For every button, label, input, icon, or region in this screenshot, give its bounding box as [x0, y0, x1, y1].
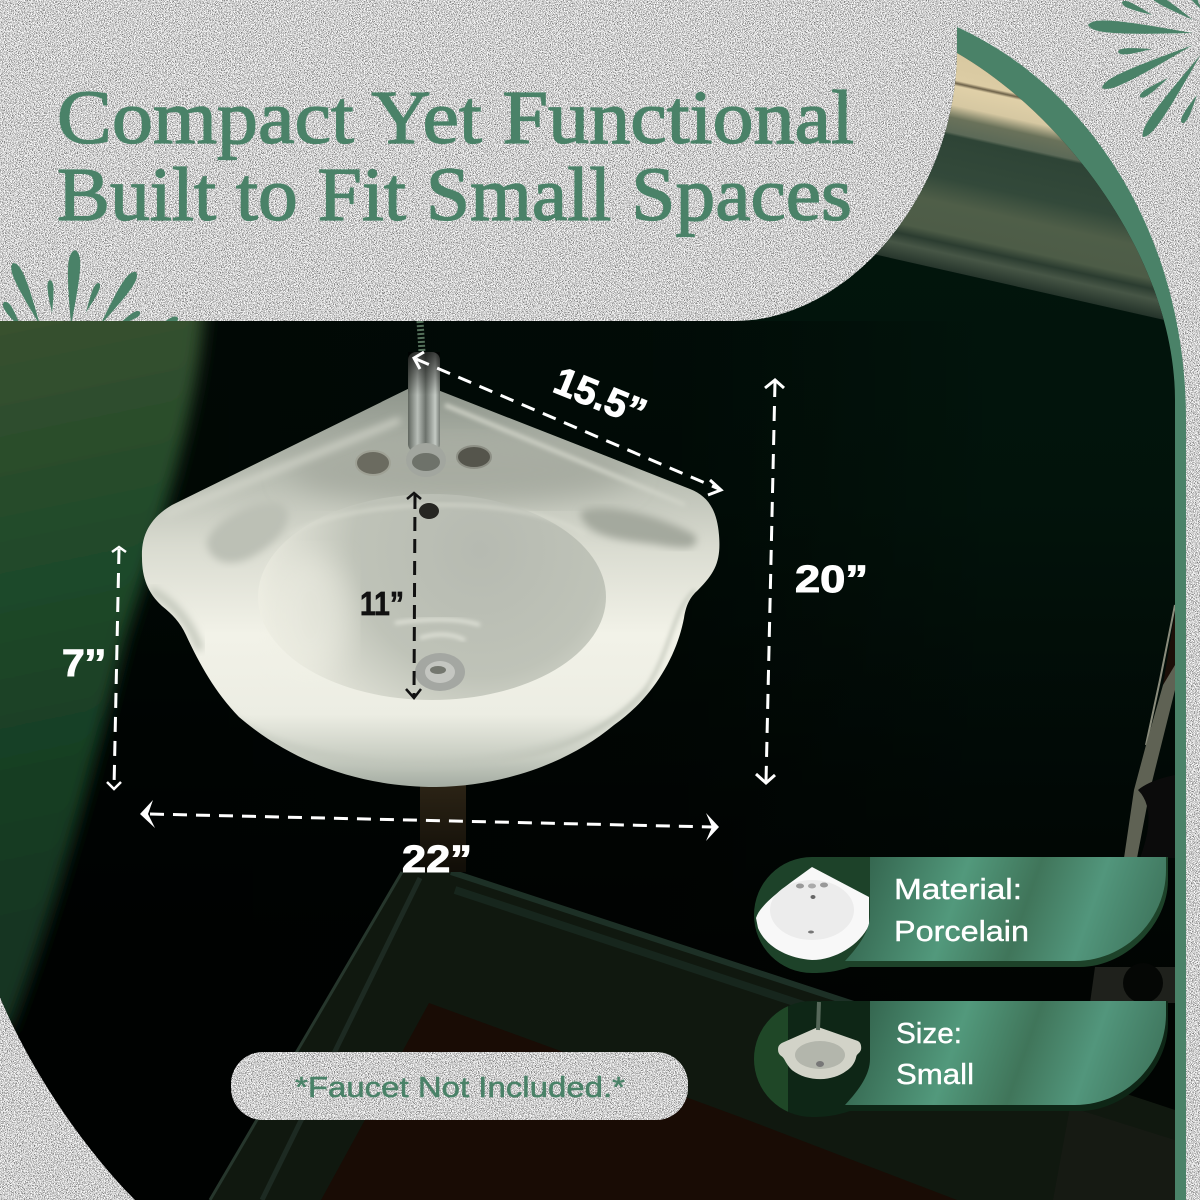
dimension: 11 inch: 11”	[360, 585, 404, 622]
tap holes	[356, 451, 390, 475]
lower lip	[247, 690, 650, 751]
far right panel	[1053, 1107, 1175, 1200]
basin	[258, 494, 606, 700]
wood floor	[321, 1003, 957, 1200]
card: material: Porcelain	[894, 916, 1029, 948]
right rim ridges	[591, 589, 696, 733]
sink support post	[420, 780, 466, 872]
green arc border	[957, 27, 1186, 1200]
note pill: faucet not included: *Faucet Not Included.*	[295, 1072, 625, 1104]
dimension: 11 inch	[360, 493, 421, 698]
sink	[142, 321, 719, 787]
dimension: 7 inch	[62, 547, 126, 789]
right side object	[1090, 605, 1175, 1003]
card: size	[754, 1001, 1168, 1117]
dimension: 22 inch: 22”	[402, 839, 472, 881]
card band	[845, 857, 1166, 961]
title: Compact Yet Functional	[57, 76, 854, 160]
dimension: 22 inch	[140, 800, 719, 881]
decorative leaf burst: top left	[1, 250, 179, 332]
note pill: faucet not included	[231, 1052, 688, 1120]
card band	[845, 1001, 1166, 1105]
title	[57, 76, 854, 237]
soap dish right	[580, 508, 696, 548]
overflow hole	[419, 503, 439, 519]
card: size: Small	[896, 1059, 974, 1091]
soap dish left	[207, 502, 288, 562]
left wall	[0, 300, 205, 1030]
card text: Material:	[894, 874, 1022, 906]
left ear shading	[150, 590, 200, 650]
dimension: 20 inch	[756, 380, 868, 783]
wall shading	[0, 321, 708, 1200]
drain	[415, 653, 465, 691]
title: Built to Fit Small Spaces	[57, 153, 852, 237]
rim shading	[290, 436, 630, 504]
dimension: 7 inch: 7’’	[62, 643, 106, 685]
baseboard highlights	[208, 871, 854, 1200]
faucet	[408, 321, 440, 471]
baseboard	[210, 870, 1175, 1200]
decorative leaf burst: top right	[1088, 0, 1200, 140]
thumbnail: white sink	[756, 867, 869, 960]
ceiling moulding	[875, 53, 1164, 320]
card text: Size:	[896, 1018, 962, 1050]
dimension: 15.5 inch: 15.5”	[548, 360, 652, 435]
card: material	[754, 857, 1168, 973]
dimension: 20 inch: 20”	[795, 559, 868, 601]
thumbnail: sink in room	[754, 1001, 861, 1117]
dimension: 15.5 inch	[414, 352, 721, 495]
